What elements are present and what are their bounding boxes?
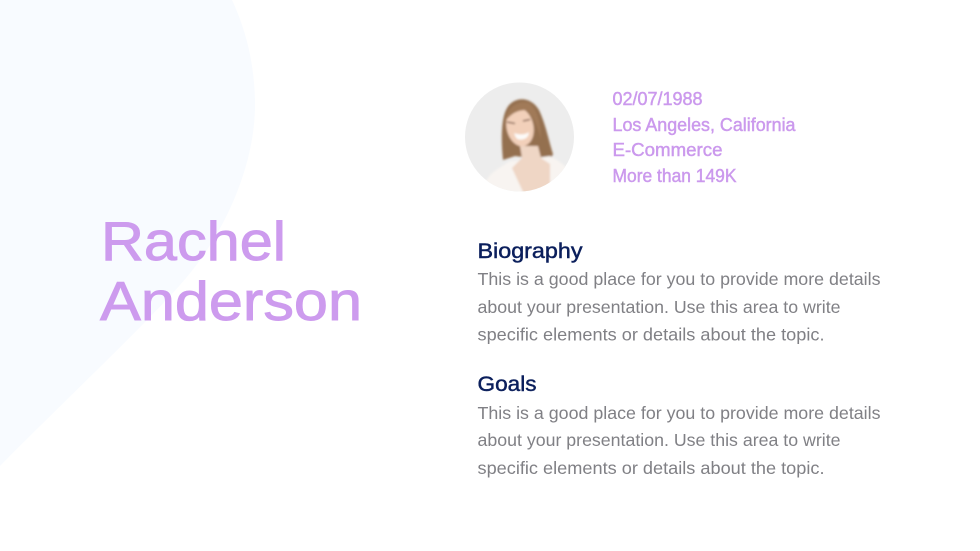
title: name: [100, 210, 362, 332]
clothes: [488, 154, 564, 192]
goals text: about your presentation. Use this area to write: [478, 430, 840, 450]
title: name: Rachel: [101, 210, 286, 272]
goals section: [478, 373, 881, 478]
profile details: Los Angeles, California: [612, 115, 796, 135]
profile details: 02/07/1988: [612, 89, 702, 109]
biography text: [478, 269, 881, 344]
title: name: Anderson: [100, 270, 362, 332]
biography text: This is a good place for you to provide more details: [478, 269, 881, 289]
goals text: [478, 403, 881, 478]
hair fringe: [506, 102, 540, 130]
hair: [502, 99, 553, 160]
neck and chest: [512, 146, 550, 194]
profile details: More than 149K: [612, 166, 736, 186]
smile: [514, 132, 529, 140]
biography text: specific elements or details about the topic.: [478, 324, 824, 344]
goals text: This is a good place for you to provide more details: [478, 403, 881, 423]
portrait photo: [465, 82, 576, 194]
biography text: about your presentation. Use this area to write: [478, 297, 840, 317]
biography section: [478, 240, 881, 344]
profile details: E-Commerce: [612, 140, 722, 160]
face: [504, 108, 536, 148]
goals text: specific elements or details about the topic.: [478, 458, 824, 478]
background shape: [0, 0, 255, 466]
profile details: [612, 89, 796, 186]
biography heading: Biography: [478, 240, 583, 263]
goals heading: Goals: [478, 373, 536, 396]
